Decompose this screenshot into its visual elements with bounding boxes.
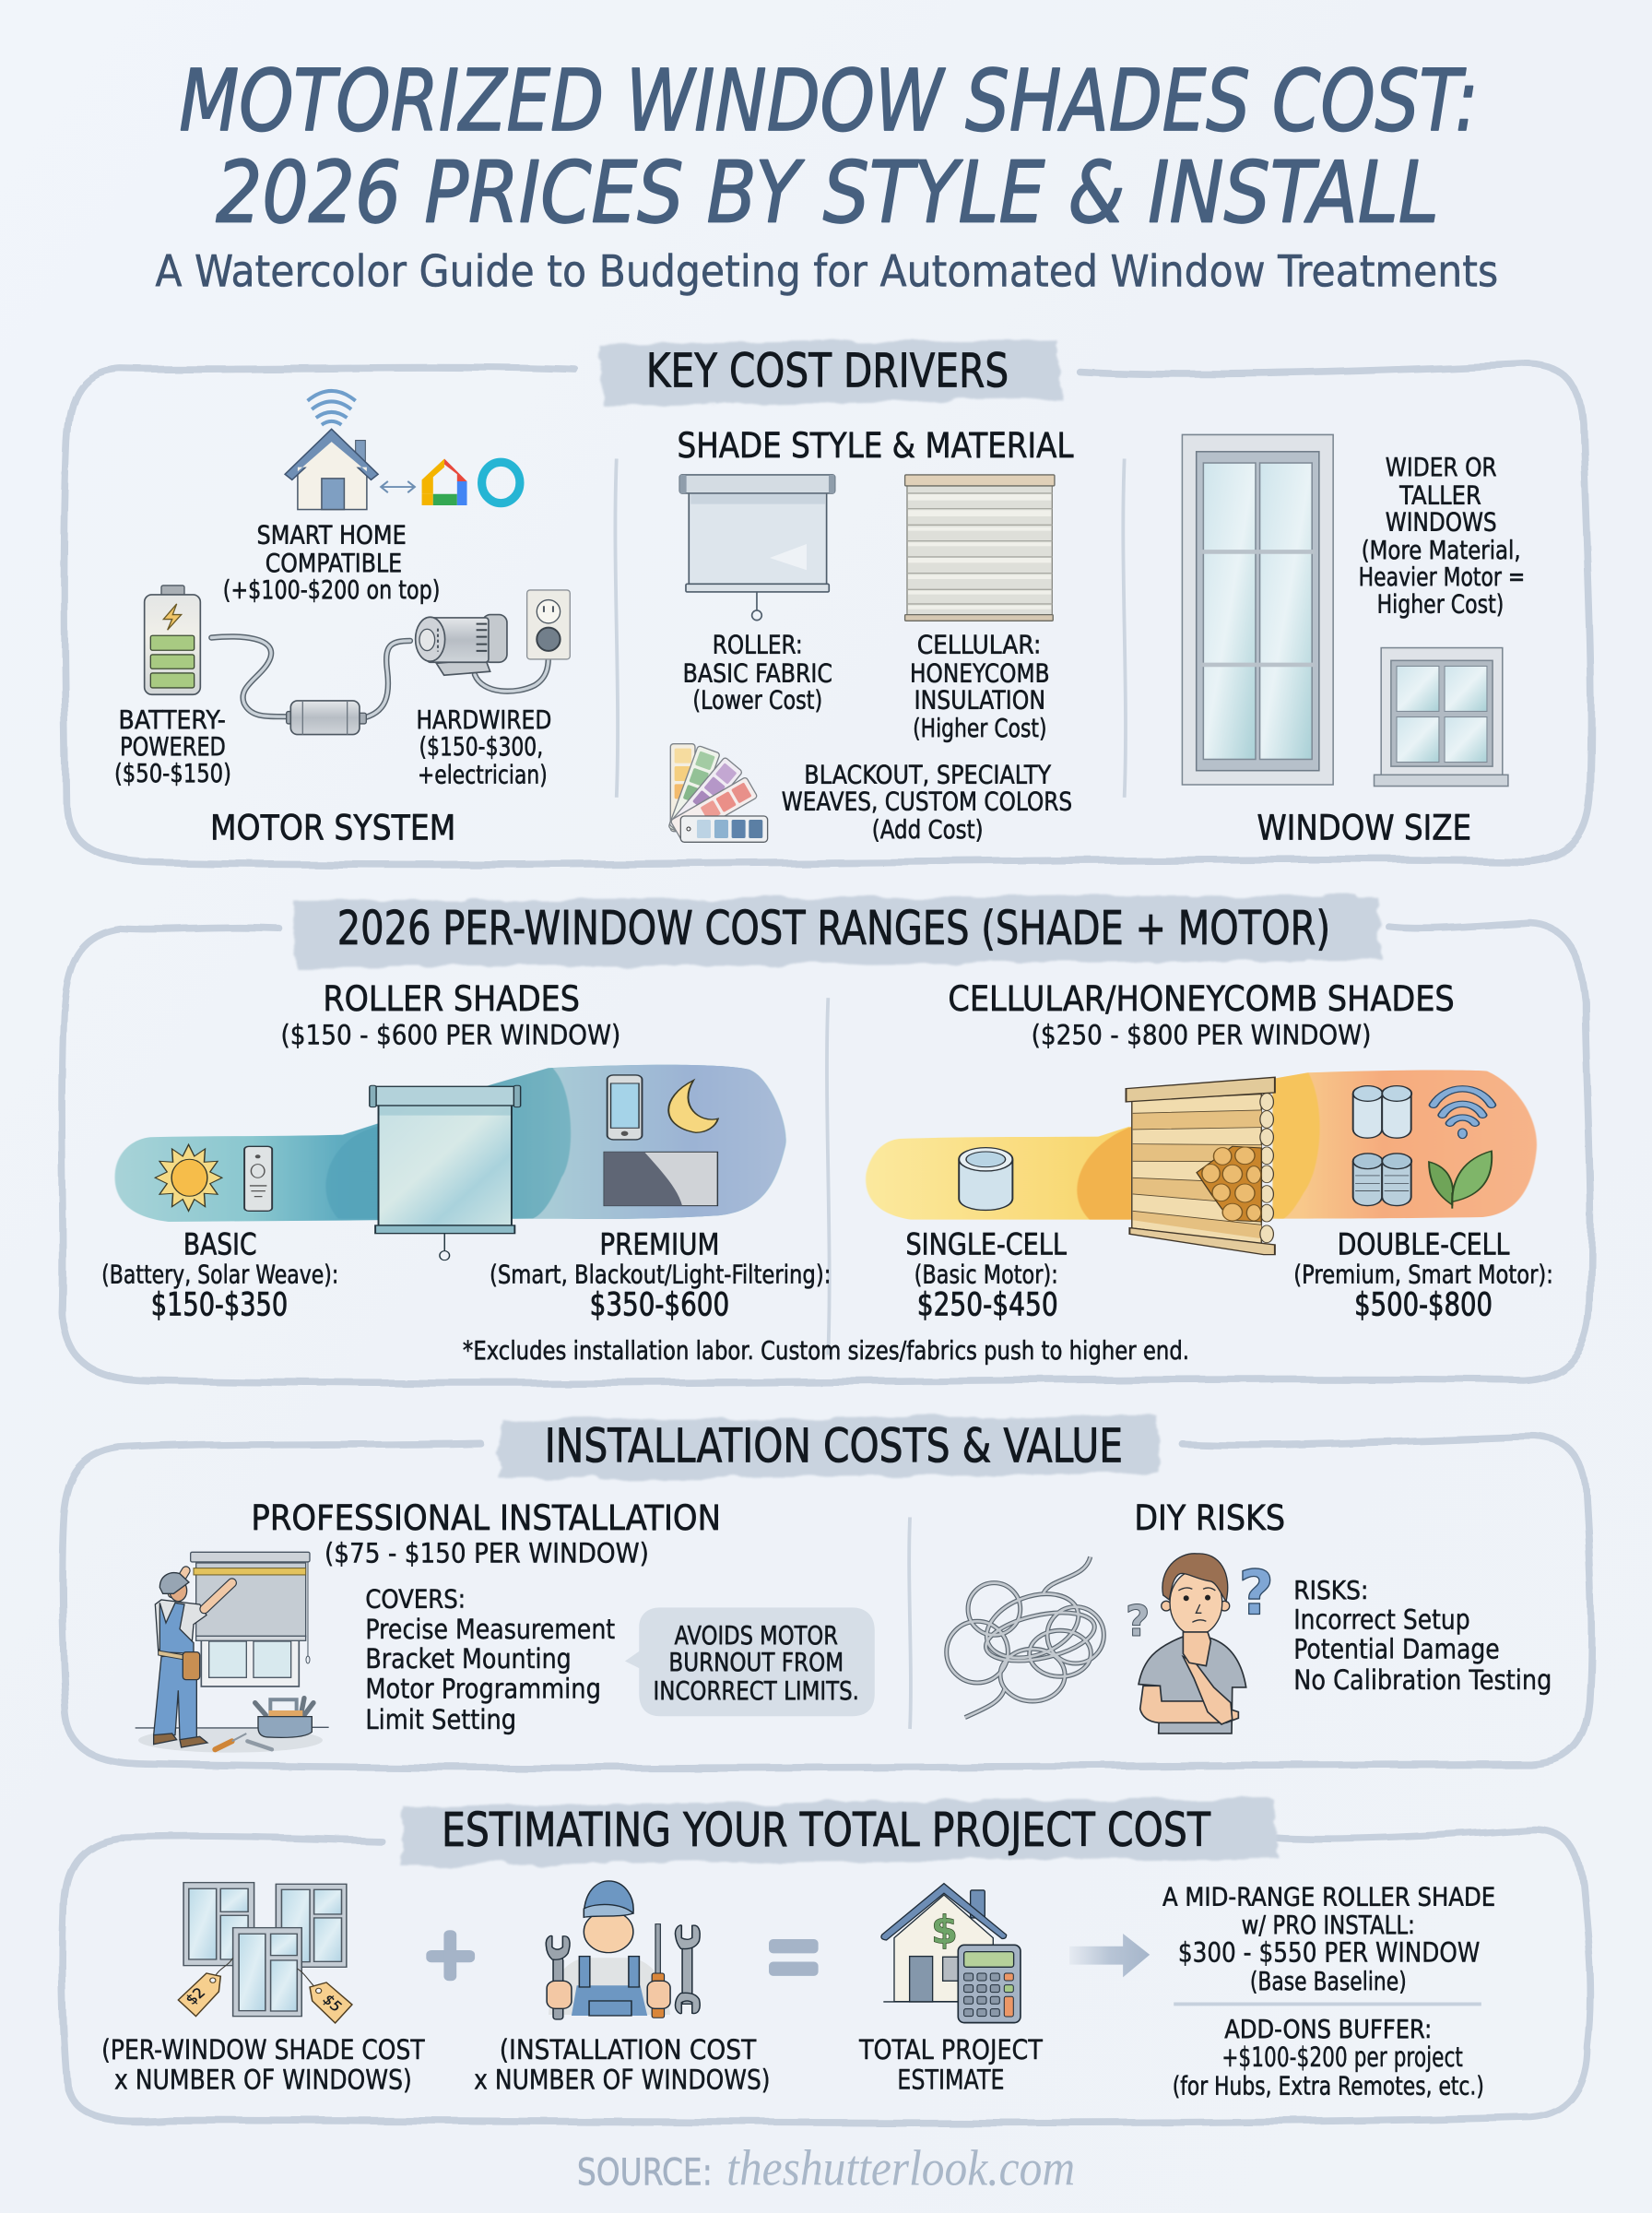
label: single-cell: $250-$450 <box>917 1287 1058 1324</box>
text: hardwired <box>416 705 551 789</box>
icon: phone <box>608 1075 642 1140</box>
heading background: cost ranges <box>293 894 1383 968</box>
icon: installer with tools <box>546 1881 700 2019</box>
illustrations: shade styles <box>668 475 1055 842</box>
icon: double cell <box>1353 1086 1411 1206</box>
source credit: SOURCE: <box>577 2151 713 2194</box>
subheading: roller shades: ROLLER SHADES <box>323 978 580 1019</box>
icon: moon <box>668 1081 718 1132</box>
label: double-cell: $500-$800 <box>1354 1287 1493 1324</box>
subheading: professional installation: PROFESSIONAL INSTALLATION <box>251 1497 721 1538</box>
text: wider or taller windows: WIDER OR <box>1386 453 1497 482</box>
text: risks list: RISKS: <box>1293 1576 1368 1605</box>
text: mid-range example <box>1162 1882 1495 1996</box>
source credit <box>577 2139 1075 2195</box>
text: wider or taller windows: Higher Cost) <box>1377 589 1504 619</box>
subheading: roller shades <box>281 978 620 1051</box>
icon: battery <box>145 586 200 694</box>
text: per-window shade cost: x NUMBER OF WINDOWS) <box>114 2064 412 2095</box>
text: hardwired: ($150-$300, <box>419 732 543 762</box>
text: total project estimate <box>858 2034 1043 2095</box>
subheading: roller shades: ($150 - $600 PER WINDOW) <box>281 1020 620 1051</box>
text: hardwired: HARDWIRED <box>416 705 551 735</box>
icon: roller shade <box>370 1085 521 1260</box>
text: add-ons buffer: (for Hubs, Extra Remotes, etc.) <box>1173 2071 1484 2101</box>
panel frame: key cost drivers <box>65 364 1591 864</box>
icon: smart home <box>285 391 520 510</box>
icon: leaf <box>1429 1151 1492 1209</box>
text: wider or taller windows: Heavier Motor = <box>1359 562 1525 592</box>
text: cellular honeycomb insulation: CELLULAR: <box>917 631 1041 660</box>
icon: sun <box>155 1144 222 1211</box>
text: battery-powered: ($50-$150) <box>114 759 231 788</box>
title <box>179 52 1479 242</box>
icon: small window <box>1375 648 1508 787</box>
text: total project estimate: TOTAL PROJECT <box>858 2034 1043 2065</box>
label: premium roller <box>490 1227 831 1324</box>
icon: motor system illustration <box>145 586 570 735</box>
text: covers list <box>365 1584 615 1735</box>
text: risks list: Incorrect Setup <box>1293 1604 1470 1635</box>
subheading: cellular shades <box>948 978 1455 1051</box>
heading: cost ranges: 2026 PER-WINDOW COST RANGES (SHADE + MOTOR) <box>337 901 1330 955</box>
icon: wall outlet <box>527 590 570 659</box>
subheading: shade style and material: SHADE STYLE & MATERIAL <box>678 425 1074 466</box>
subheading: professional installation: ($75 - $150 PER WINDOW) <box>324 1537 649 1568</box>
icon: remote <box>244 1146 272 1211</box>
text: risks list: No Calibration Testing <box>1293 1664 1552 1696</box>
text: wider or taller windows: (More Material, <box>1362 536 1521 565</box>
label: basic roller: $150-$350 <box>151 1287 288 1324</box>
panel: installation costs and value <box>63 1415 1591 1768</box>
callout: avoids motor burnout <box>625 1607 875 1716</box>
chart: cellular shade cost band <box>866 1071 1537 1255</box>
subheading: window size: WINDOW SIZE <box>1257 808 1471 848</box>
icon: honeycomb shade <box>1126 1077 1275 1255</box>
chart: roller shade cost band <box>115 1065 785 1260</box>
text: mid-range example: A MID-RANGE ROLLER SHADE <box>1162 1882 1495 1911</box>
text: smart home compatible: SMART HOME <box>257 520 407 550</box>
text: installation cost: x NUMBER OF WINDOWS) <box>474 2064 771 2095</box>
illustration: confused person: ? <box>1126 1596 1150 1646</box>
label: double-cell <box>1293 1227 1553 1324</box>
text: per-window shade cost <box>101 2034 425 2095</box>
text: blackout and specialty add cost <box>782 760 1072 845</box>
icon: cables <box>211 636 549 718</box>
label: single-cell <box>905 1227 1067 1324</box>
subheading: cellular shades: ($250 - $800 PER WINDOW) <box>1032 1020 1371 1051</box>
text: smart home compatible: (+$100-$200 on top) <box>223 575 440 605</box>
text: wider or taller windows: WINDOWS <box>1386 508 1497 538</box>
label: basic roller: BASIC <box>183 1227 257 1262</box>
text: add-ons buffer: ADD-ONS BUFFER: <box>1224 2015 1432 2044</box>
text: mid-range example: (Base Baseline) <box>1250 1967 1407 1996</box>
icon: colour swatch fan <box>668 744 768 842</box>
icon: house with calculator: $ <box>931 1907 958 1952</box>
source credit: theshutterlook.com <box>726 2139 1075 2195</box>
icon: windows with price tags <box>178 1883 352 2023</box>
label: premium roller: PREMIUM <box>599 1227 719 1262</box>
text: wider or taller windows <box>1359 453 1525 619</box>
subtitle: A Watercolor Guide to Budgeting for Automated Window Treatments <box>155 247 1498 298</box>
icon: hardwired motor <box>416 615 507 675</box>
text: blackout and specialty add cost: BLACKOUT, SPECIALTY <box>804 760 1051 789</box>
text: total project estimate: ESTIMATE <box>897 2064 1005 2095</box>
heading background: estimating <box>401 1798 1278 1865</box>
text: covers list: Limit Setting <box>365 1704 516 1735</box>
subheading: motor system: MOTOR SYSTEM <box>210 808 455 848</box>
text: roller basic fabric: ROLLER: <box>713 631 803 660</box>
text: blackout and specialty add cost: WEAVES, CUSTOM COLORS <box>782 787 1072 817</box>
text: smart home compatible <box>223 520 440 605</box>
text: mid-range example: $300 - $550 PER WINDOW <box>1178 1937 1480 1969</box>
text: add-ons buffer <box>1173 2015 1484 2101</box>
subheading: cellular shades: CELLULAR/HONEYCOMB SHADES <box>948 978 1455 1019</box>
icon: plus <box>426 1930 475 1981</box>
label: single-cell: (Basic Motor): <box>914 1260 1058 1289</box>
heading background: key cost drivers <box>598 338 1061 407</box>
text: cellular honeycomb insulation <box>910 631 1050 743</box>
icon: windows with price tags: $5 <box>319 1991 346 2015</box>
callout: avoids motor burnout: BURNOUT FROM <box>668 1648 844 1677</box>
text: battery-powered <box>114 705 231 788</box>
text: smart home compatible: COMPATIBLE <box>266 549 402 578</box>
panel: per-window cost ranges <box>62 894 1591 1383</box>
label: basic roller <box>101 1227 338 1324</box>
text: covers list: Bracket Mounting <box>365 1643 572 1675</box>
text: risks list <box>1293 1576 1552 1696</box>
text: cellular honeycomb insulation: (Higher Cost) <box>913 714 1046 743</box>
text: roller basic fabric: (Lower Cost) <box>692 685 822 715</box>
panel: estimating total project cost <box>63 1798 1590 2123</box>
subheading: diy risks: DIY RISKS <box>1134 1497 1285 1538</box>
subheading: professional installation <box>251 1497 721 1568</box>
callout: avoids motor burnout: AVOIDS MOTOR <box>674 1621 838 1651</box>
text: installation cost: (INSTALLATION COST <box>500 2034 756 2065</box>
panel: key cost drivers <box>65 338 1591 864</box>
heading background: installation <box>500 1415 1160 1479</box>
icon: tall window <box>1182 434 1333 785</box>
text: roller basic fabric: BASIC FABRIC <box>683 658 832 688</box>
text: roller basic fabric <box>683 631 832 715</box>
icon: wifi <box>1434 1089 1492 1139</box>
text: mid-range example: w/ PRO INSTALL: <box>1242 1911 1415 1940</box>
illustration: installer at window <box>136 1552 329 1753</box>
heading: key cost drivers: KEY COST DRIVERS <box>646 343 1009 397</box>
text: hardwired: +electrician) <box>418 760 548 789</box>
icon: cellular shade <box>905 475 1055 621</box>
text: covers list: COVERS: <box>365 1584 466 1614</box>
footnote: *Excludes installation labor. Custom sizes/fabrics push to higher end. <box>463 1336 1189 1366</box>
illustration: confused person <box>1126 1554 1274 1734</box>
panel frame: estimating <box>63 1829 1590 2123</box>
illustration: confused person: ? <box>1238 1557 1274 1629</box>
panel frame: installation <box>63 1437 1591 1768</box>
heading: estimating: ESTIMATING YOUR TOTAL PROJECT COST <box>442 1803 1210 1857</box>
text: risks list: Potential Damage <box>1293 1633 1500 1664</box>
label: double-cell: DOUBLE-CELL <box>1338 1227 1510 1262</box>
icon: inline motor <box>287 701 366 735</box>
icon: windows with price tags: $2 <box>182 1984 209 2008</box>
title: 2026 PRICES BY STYLE & INSTALL <box>216 143 1439 242</box>
text: blackout and specialty add cost: (Add Cost) <box>872 815 984 845</box>
label: double-cell: (Premium, Smart Motor): <box>1293 1260 1553 1289</box>
text: per-window shade cost: (PER-WINDOW SHADE COST <box>101 2034 425 2065</box>
label: premium roller: $350-$600 <box>590 1287 729 1324</box>
panel frame: cost ranges <box>62 923 1591 1383</box>
heading: installation: INSTALLATION COSTS & VALUE <box>545 1419 1123 1473</box>
label: premium roller: (Smart, Blackout/Light-Filtering): <box>490 1260 831 1289</box>
text: cellular honeycomb insulation: HONEYCOMB <box>910 658 1050 688</box>
text: covers list: Motor Programming <box>365 1673 601 1704</box>
icon: roller shade <box>679 475 835 621</box>
text: battery-powered: BATTERY- <box>119 705 226 735</box>
label: basic roller: (Battery, Solar Weave): <box>101 1260 338 1289</box>
icon: house with calculator <box>881 1884 1021 2023</box>
callout: avoids motor burnout: INCORRECT LIMITS. <box>654 1676 859 1706</box>
illustration: tangled cables <box>947 1556 1103 1718</box>
icon: equals <box>769 1939 819 1976</box>
label: single-cell: SINGLE-CELL <box>905 1227 1067 1262</box>
icon: single cell <box>959 1148 1012 1210</box>
arrow <box>1069 1934 1150 1977</box>
text: cellular honeycomb insulation: INSULATION <box>914 685 1045 715</box>
text: wider or taller windows: TALLER <box>1398 480 1481 510</box>
text: add-ons buffer: +$100-$200 per project <box>1221 2041 1463 2073</box>
text: battery-powered: POWERED <box>120 732 226 762</box>
text: covers list: Precise Measurement <box>365 1614 615 1645</box>
icon: blackout fabric swatch <box>604 1152 717 1206</box>
text: installation cost <box>474 2034 771 2095</box>
